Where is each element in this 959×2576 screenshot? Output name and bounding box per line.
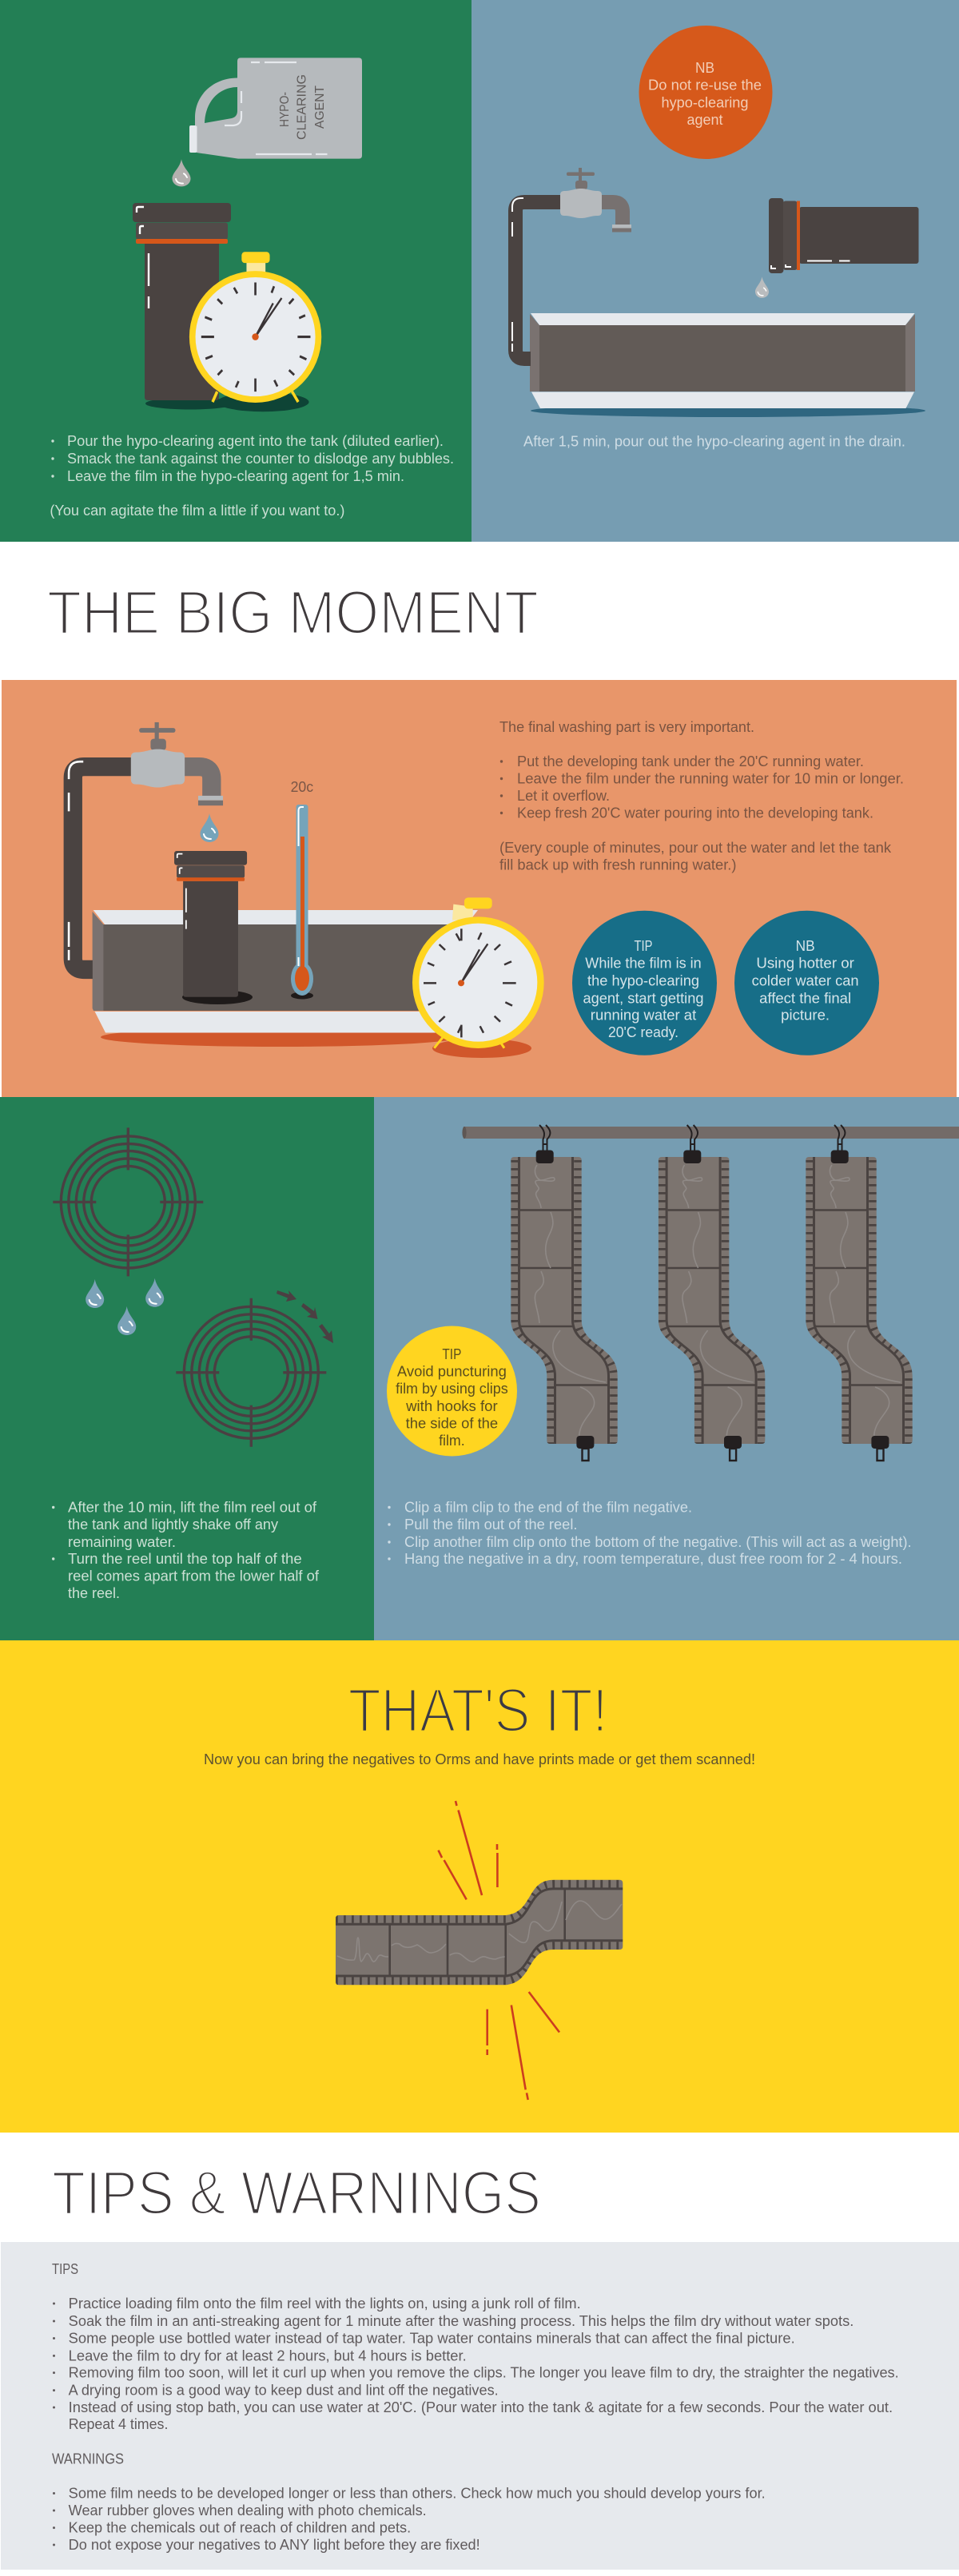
text: reel instructions: the reel. [68,1585,120,1601]
text: warnings list [52,2451,766,2553]
icon: turn arrows [277,1290,333,1343]
text: tips list: Some people use bottled water instead of tap water. Tap water contains minerals that can affect the final picture. [69,2330,795,2346]
icon: film reel turning [176,1298,326,1447]
callout: do not re-use: NB [695,60,714,76]
icon: finished film negative [336,1880,623,1985]
icon: drop of agent [172,159,191,186]
text: reel instructions: remaining water. [68,1534,176,1550]
text: warnings list: Wear rubber gloves when dealing with photo chemicals. [69,2502,427,2518]
icon: thermometer [291,805,313,999]
icon: hanging film strip 1 [511,1125,618,1461]
icon: hanging film strip 2 [659,1125,765,1461]
text: reel instructions: the tank and lightly shake off any [68,1517,278,1532]
callout: tip running water: running water at [591,1008,696,1024]
callout: do not re-use [639,26,772,159]
text: final washing instructions: The final washing part is very important. [499,719,754,735]
icon: drop poured out [755,276,769,298]
callout: tip avoid puncturing: with hooks for [405,1398,498,1414]
icon: hanging film strip 3 [806,1125,913,1461]
text: pour instructions: Smack the tank against the counter to dislodge any bubbles. [67,451,454,467]
callout: tip avoid puncturing: the side of the [406,1416,498,1432]
text: final washing instructions: Keep fresh 20'C water pouring into the developing tank. [517,805,873,821]
callout: tip running water: 20'C ready. [608,1024,678,1040]
callout: tip avoid puncturing: Avoid puncturing [397,1364,507,1380]
icon: hypo-clearing agent bottle: AGENT [313,85,327,129]
text: warnings list: Do not expose your negatives to ANY light before they are fixed! [69,2537,480,2553]
icon: developing tank [133,203,235,409]
panel: pour out the agent [472,0,959,542]
icon: developing tank in sink [174,851,253,1004]
text: warnings list: WARNINGS [52,2451,124,2467]
text: final washing instructions [499,719,904,873]
text: hanging instructions: Pull the film out of the reel. [404,1517,577,1532]
text: reel instructions: After the 10 min, lift the film reel out of [68,1499,317,1515]
callout: tip running water: TIP [635,938,652,954]
icon: stopwatch clock [189,252,321,411]
panel: final wash [2,680,957,1097]
panel: tips and warnings [1,2242,959,2570]
text: warnings list: Keep the chemicals out of reach of children and pets. [69,2520,411,2536]
text: reel instructions [52,1499,320,1601]
text: pour instructions: Pour the hypo-clearing agent into the tank (diluted earlier). [67,433,444,449]
icon: tap and pipe [512,168,631,359]
icon: film reel closed [53,1127,203,1276]
text: bring negatives to Orms: Now you can bring the negatives to Orms and have prints made or get them scanned! [204,1751,755,1767]
text: final washing instructions: Leave the film under the running water for 10 min or longer. [517,770,904,786]
text: reel instructions: reel comes apart from the lower half of [68,1568,320,1584]
heading: that's it: THAT'S IT! [348,1676,607,1745]
text: tips list: Soak the film in an anti-streaking agent for 1 minute after the washing process. This helps the film dry without water spots. [69,2313,854,2329]
panel: hang the negatives [374,1097,959,1640]
panel: pour in hypo-clearing agent [0,0,472,542]
text: tips list: Leave the film to dry for at least 2 hours, but 4 hours is better. [69,2347,467,2363]
text: tips list: Instead of using stop bath, you can use water at 20'C. (Pour water into the tank & agitate for a few seconds. Pour the water out. [69,2399,893,2415]
callout: tip running water: the hypo-clearing [587,973,699,989]
callout: tip running water: agent, start getting [583,991,703,1007]
text: hanging instructions: Clip a film clip to the end of the film negative. [404,1499,692,1515]
text: 20c label: 20c [291,779,313,795]
icon: sink [530,313,925,417]
text: pour instructions: Leave the film in the hypo-clearing agent for 1,5 min. [67,468,404,484]
icon: hypo-clearing agent bottle: CLEARING [296,74,309,140]
text: reel instructions: Turn the reel until the top half of the [68,1551,302,1567]
text: final washing instructions: Let it overflow. [517,788,610,804]
icon: burst lines [438,1801,559,2100]
heading: tips and warnings: TIPS & WARNINGS [52,2159,541,2228]
icon: hypo-clearing agent bottle: HYPO- [278,92,292,127]
icon: hypo-clearing agent bottle [189,58,362,159]
icon: water drop [200,813,219,842]
callout: tip running water: While the film is in [585,956,702,972]
text: hanging instructions [388,1499,911,1567]
text: final washing instructions: Put the developing tank under the 20'C running water. [517,753,864,769]
text: after 1,5 min: After 1,5 min, pour out the hypo-clearing agent in the drain. [523,433,905,449]
panel: that's it [0,1640,959,2133]
callout: tip avoid puncturing: TIP [442,1346,461,1362]
callout: nb water temperature: Using hotter or [756,956,854,972]
text: hanging instructions: Hang the negative in a dry, room temperature, dust free room for 2 - 4 hours. [404,1551,902,1567]
text: tips list: Practice loading film onto the film reel with the lights on, using a junk roll of film. [69,2296,581,2312]
callout: nb water temperature: NB [796,938,815,954]
callout: do not re-use: hypo-clearing [662,94,748,110]
callout: nb water temperature: colder water can [752,973,859,989]
text: warnings list: Some film needs to be developed longer or less than others. Check how much you should develop yours for. [69,2485,766,2501]
text: tips list: A drying room is a good way to keep dust and lint off the negatives. [69,2383,499,2399]
icon: tap and pipe [69,722,223,969]
icon: water drops [86,1278,164,1335]
text: hanging instructions: Clip another film clip onto the bottom of the negative. (This will act as a weight). [404,1534,911,1550]
text: tips list: Removing film too soon, will let it curl up when you remove the clips. The longer you leave film to dry, the straighter the negatives. [69,2365,899,2381]
text: tips list [52,2261,899,2432]
icon: clock [412,897,544,1058]
callout: tip avoid puncturing: film. [439,1433,465,1449]
text: pour instructions: (You can agitate the film a little if you want to.) [50,503,344,519]
callout: tip avoid puncturing [387,1326,517,1456]
text: final washing instructions: fill back up with fresh running water.) [499,857,737,873]
text: pour instructions [50,433,454,519]
heading: the big moment: THE BIG MOMENT [47,578,539,647]
text: final washing instructions: (Every couple of minutes, pour out the water and let the tank [499,840,892,856]
text: tips list: TIPS [52,2261,78,2277]
callout: nb water temperature [734,911,879,1055]
callout: nb water temperature: affect the final [759,991,851,1007]
icon: drying rod [462,1127,959,1139]
callout: tip avoid puncturing: film by using clips [396,1381,508,1397]
callout: tip running water [572,911,717,1055]
icon: wash sink [93,910,478,1047]
panel: lift the film reel [0,1097,374,1640]
callout: nb water temperature: picture. [781,1008,830,1024]
callout: do not re-use: agent [687,112,722,128]
callout: do not re-use: Do not re-use the [648,78,762,93]
icon: tipped developing tank [769,198,919,273]
text: tips list: Repeat 4 times. [69,2416,168,2432]
